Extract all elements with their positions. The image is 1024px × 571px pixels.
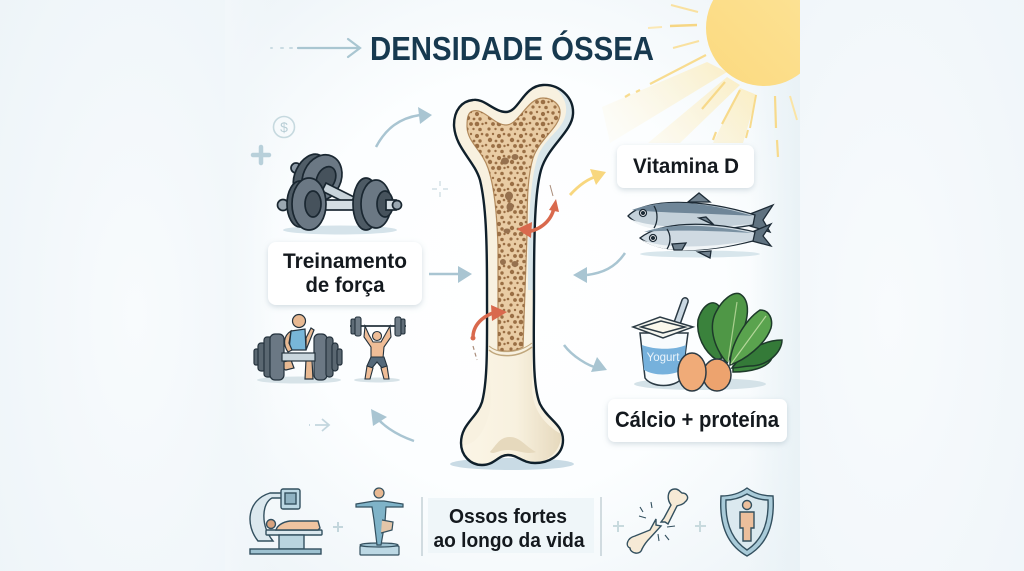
label: Vitamin D [617, 145, 754, 188]
bone [450, 85, 574, 470]
label: strength training: Treinamento [283, 249, 407, 273]
icon: dollar coin: $ [280, 119, 288, 135]
plus [333, 522, 343, 532]
label: Vitamin D: Vitamina D [633, 155, 739, 178]
arrow: bone to food [564, 345, 607, 372]
icon: balance exercise [356, 488, 403, 555]
text panel: strong bones: ao longo da vida [434, 530, 585, 552]
divider [600, 497, 602, 556]
small arrow [309, 419, 329, 431]
label: calcium and protein [608, 399, 787, 442]
icon: dumbbells [278, 148, 402, 234]
icon: yogurt, eggs and spinach [633, 293, 782, 391]
arrow: bone to body [371, 409, 414, 441]
arrow: lower red bone remodeling [470, 305, 507, 360]
label: strength training: de força [306, 273, 385, 297]
divider [421, 497, 423, 556]
label: strength training [268, 242, 422, 305]
icon: protection shield [721, 488, 773, 556]
plus [695, 521, 706, 532]
icon: sparkle [432, 181, 448, 197]
plus [613, 521, 624, 532]
icon: person with barbell [254, 314, 342, 384]
icon: broken bone [627, 489, 688, 553]
title: DENSIDADE ÓSSEA [370, 30, 654, 67]
arrow: strength to bone top [376, 107, 432, 147]
icon: fish [628, 193, 773, 258]
title arrow [271, 39, 360, 57]
sun with rays [602, 0, 822, 157]
arrow: strength to bone [429, 266, 472, 283]
arrow: upper red bone remodeling [517, 185, 559, 238]
arrow: fish to bone [573, 253, 625, 283]
icon: DEXA scanner [250, 489, 322, 554]
text panel: strong bones [428, 498, 594, 553]
text panel: strong bones: Ossos fortes [449, 506, 567, 528]
icon: person lifting overhead [350, 317, 406, 382]
label: calcium and protein: Cálcio + proteína [615, 407, 780, 432]
icon: dollar coin [274, 116, 294, 138]
icon: plus [253, 147, 269, 163]
icon: yogurt, eggs and spinach: Yogurt [647, 352, 680, 364]
arrow: yellow to vitamin D [570, 169, 606, 195]
